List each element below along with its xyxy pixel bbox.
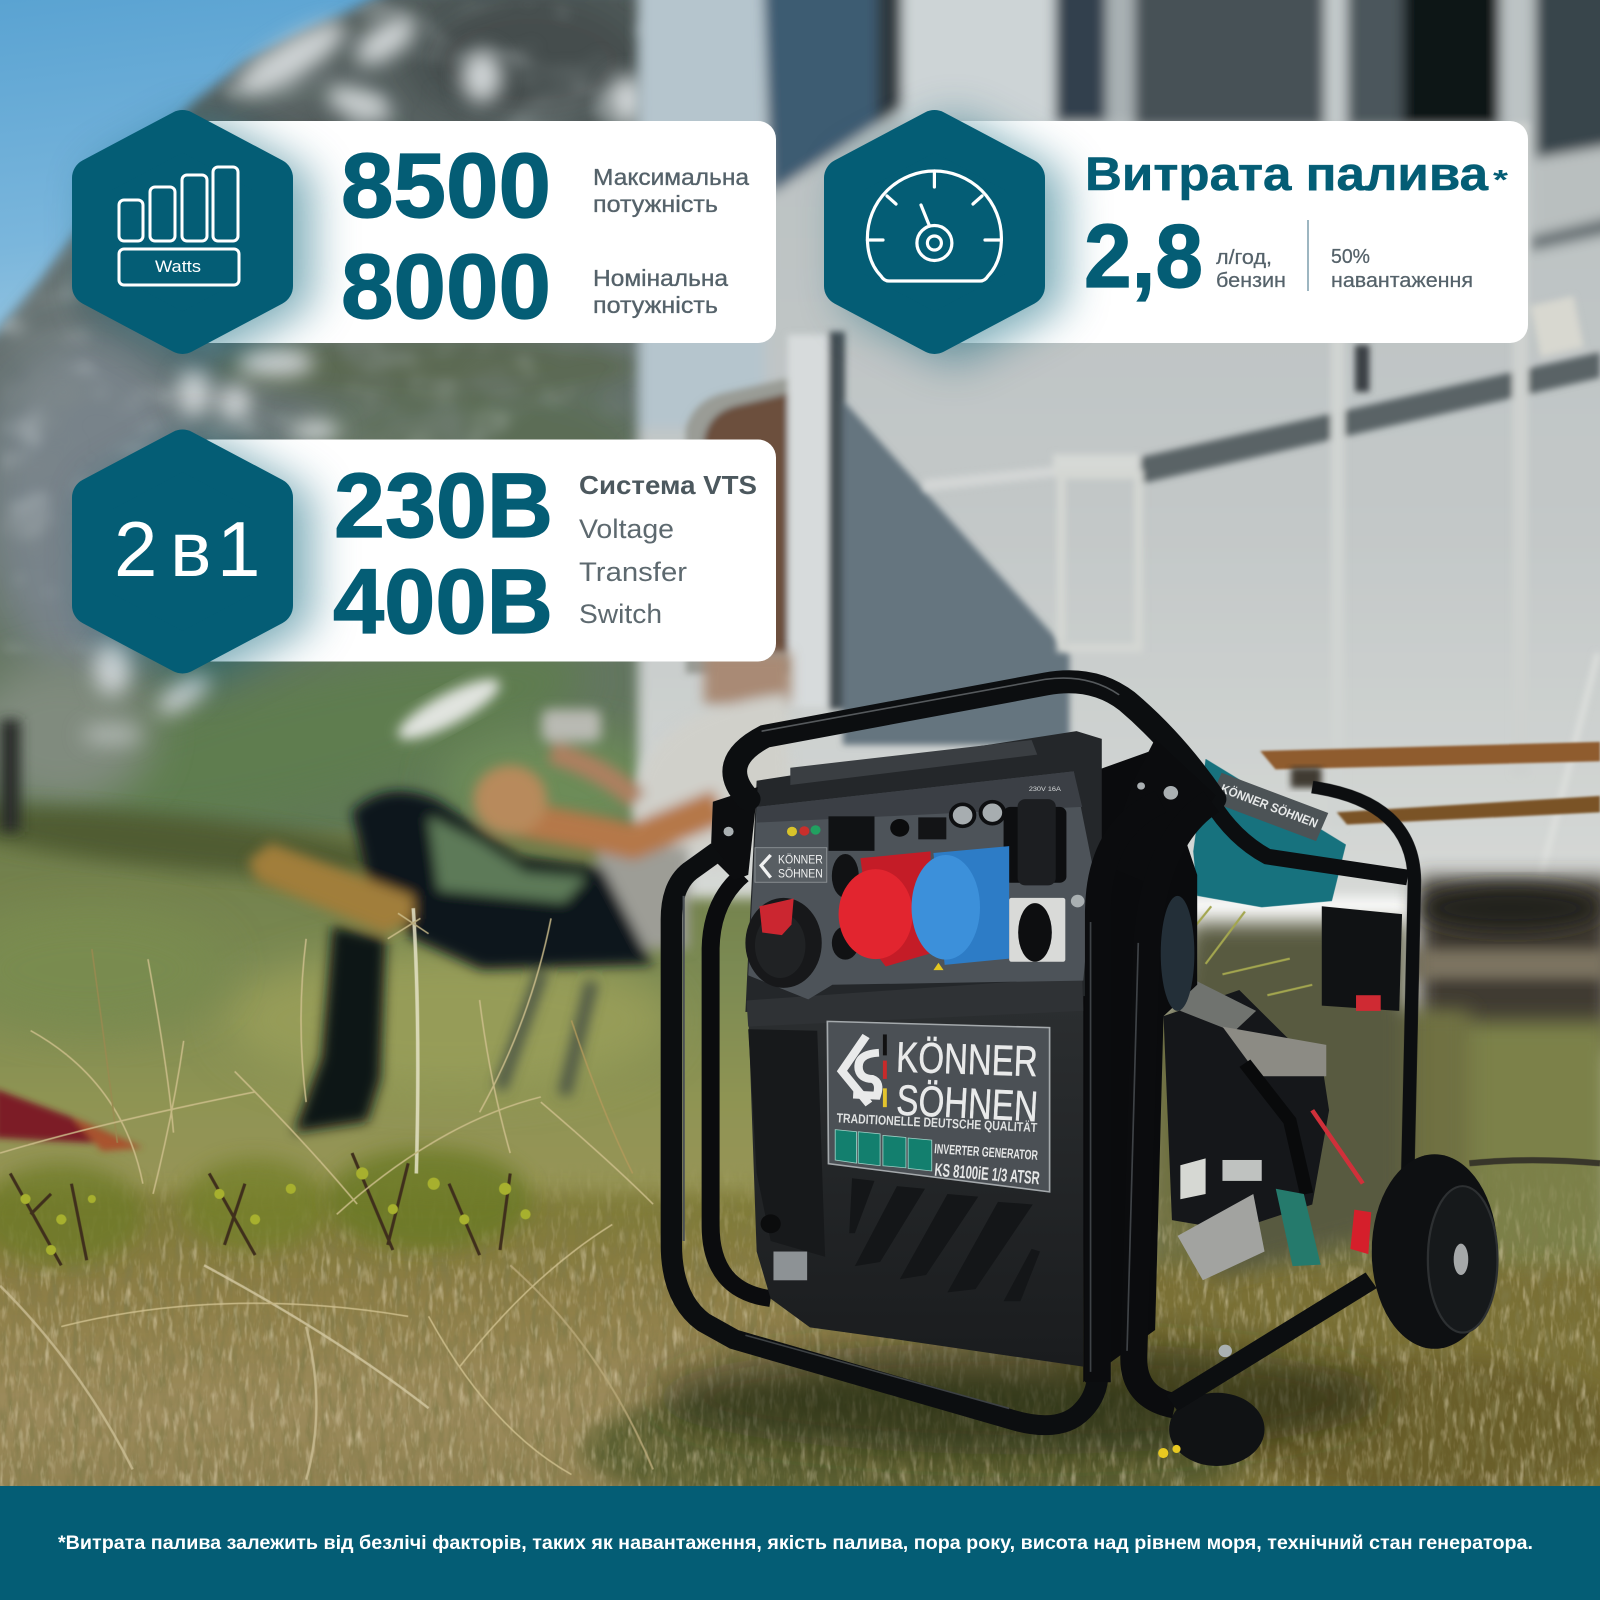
hexagon shadow — [864, 138, 1045, 342]
hexagon badge — [844, 130, 1025, 334]
economy switch — [918, 817, 946, 839]
hexagon shadow — [112, 138, 293, 342]
red 400V socket — [839, 851, 931, 966]
hexagon badge — [92, 450, 273, 654]
rear frame tube — [1312, 787, 1414, 1178]
green shrubs — [0, 1148, 531, 1265]
brand badge on panel: KÖNNER — [778, 853, 823, 866]
card background — [940, 121, 1528, 343]
warning tag — [1276, 1189, 1321, 1266]
inner left tube — [711, 875, 771, 1299]
vents — [849, 1178, 1040, 1301]
camper door and awning — [686, 332, 1069, 745]
blue 230V socket — [912, 846, 1009, 965]
see-through area behind frame — [1172, 922, 1408, 1278]
front wheel — [1169, 1393, 1265, 1466]
top handle tube — [735, 678, 1214, 799]
400 V value: 400В — [333, 551, 553, 653]
generator shadow on the ground — [653, 1342, 1388, 1454]
consumption value: 2,8 — [1084, 207, 1203, 307]
frame bracket bolts — [724, 782, 1232, 1357]
black box — [1322, 906, 1402, 1011]
slogan: TRADITIONELLE DEUTSCHE QUALITÄT — [836, 1111, 1038, 1135]
rated power value: 8000 — [341, 236, 551, 338]
fuel tank handle — [1211, 802, 1408, 878]
picnic bench and debris under the camper — [1260, 742, 1600, 1051]
dark side of housing — [1082, 749, 1197, 1382]
card background — [190, 121, 776, 343]
footer band — [0, 1486, 1600, 1600]
trousers — [597, 847, 689, 949]
brand name 2: SÖHNEN — [895, 1077, 1039, 1131]
meadow right side — [1143, 1010, 1600, 1367]
system heading: Система VTS — [579, 470, 757, 500]
load percent: 50% — [1331, 246, 1370, 268]
round black outlets — [832, 854, 859, 960]
badge text: 2 в 1 — [114, 505, 260, 593]
rating caption: 230V 16A — [1029, 786, 1061, 793]
rear arm — [551, 752, 638, 800]
rated power label: Номінальна — [593, 265, 728, 291]
shoe — [248, 843, 413, 934]
model name: KS 8100iE 1/3 ATSR — [934, 1160, 1041, 1189]
card background — [190, 440, 776, 662]
feature badges — [835, 1130, 932, 1171]
rear wheel — [1372, 1154, 1497, 1349]
meadow mid-ground — [0, 791, 1071, 1219]
hexagon shadow — [112, 458, 293, 662]
maximum power label line 2: потужність — [593, 191, 718, 217]
snow streak on hillside — [391, 669, 507, 750]
blurred seated man in a chair — [0, 653, 791, 1133]
hinge bracket joining uprights — [1103, 739, 1216, 883]
hour meter display — [828, 816, 874, 851]
front uprights — [1091, 802, 1371, 1406]
asterisk: * — [1493, 164, 1508, 195]
panel: power — [92, 121, 776, 343]
hexagon badge — [92, 130, 273, 334]
divider — [1307, 220, 1309, 291]
changeover switch — [1009, 898, 1065, 962]
green blanket — [429, 816, 587, 902]
icon label: Watts — [155, 257, 201, 276]
Voltage: Voltage — [579, 514, 674, 544]
maximum power value: 8500 — [341, 135, 551, 237]
brand badge on panel — [755, 848, 827, 882]
grass seen through the frame — [1194, 906, 1312, 995]
single phase socket — [1004, 799, 1066, 885]
fuel type: бензин — [1216, 270, 1286, 292]
small warning triangle — [933, 963, 944, 970]
breakers — [951, 802, 1004, 826]
engine — [1164, 974, 1371, 1280]
tricolour stripe — [883, 1034, 887, 1107]
panel: fuel consumption — [844, 121, 1528, 343]
load label: навантаження — [1331, 270, 1473, 292]
red object in grass — [0, 1089, 143, 1151]
control panel — [745, 771, 1093, 999]
housing — [745, 731, 1102, 1367]
unit: л/год, — [1216, 247, 1272, 269]
brand badge on panel: SÖHNEN — [778, 867, 823, 880]
camper van wall — [638, 0, 1600, 898]
outer left and bottom tube — [671, 851, 1098, 1425]
Switch: Switch — [579, 599, 662, 629]
chair legs — [500, 971, 592, 1095]
cup — [542, 709, 601, 742]
front arm — [505, 806, 719, 842]
sky — [0, 0, 714, 429]
brand name: KÖNNER — [895, 1034, 1039, 1086]
KS logo — [842, 1036, 879, 1104]
snow patches on the mountain — [82, 8, 648, 745]
yellow flowers — [1158, 1445, 1181, 1458]
230 V value: 230В — [334, 455, 553, 557]
teal fuel tank — [1193, 759, 1346, 907]
product plate — [827, 1021, 1050, 1192]
dark leg and chair — [352, 791, 653, 969]
round side emblem — [1161, 896, 1194, 1011]
panel: 2 in 1 voltage — [92, 440, 776, 662]
tank label: KÖNNER SÖHNEN — [1218, 781, 1320, 831]
left bracket joining handle and tubes — [711, 787, 758, 880]
start dial — [745, 898, 822, 988]
model type: INVERTER GENERATOR — [934, 1141, 1038, 1163]
head — [704, 653, 791, 704]
green hillside — [0, 609, 663, 870]
status lamps — [787, 825, 821, 836]
shirt — [633, 694, 791, 867]
camper side stripe, hatch and rails — [923, 122, 1600, 878]
dry foreground grass — [0, 1183, 1600, 1486]
heading: Витрата палива — [1085, 147, 1489, 200]
footnote: *Витрата палива залежить від безлічі факторів, таких як навантаження, якість палива, пора року, висота над рівнем моря, технічний стан генератора. — [58, 1533, 1533, 1554]
generator — [671, 678, 1497, 1466]
blurred mountain — [0, 0, 714, 878]
grass stems — [0, 908, 653, 1480]
reset button — [890, 819, 909, 837]
dark post left — [0, 719, 20, 832]
icon: gauge — [867, 171, 1001, 281]
maximum power label: Максимальна — [593, 164, 749, 190]
hand — [473, 765, 547, 835]
lower leg — [294, 926, 386, 1133]
Transfer: Transfer — [579, 557, 687, 587]
icon: watt bars — [119, 167, 239, 285]
rated power label line 2: потужність — [593, 292, 718, 318]
mountain rock mottling — [0, 0, 653, 653]
